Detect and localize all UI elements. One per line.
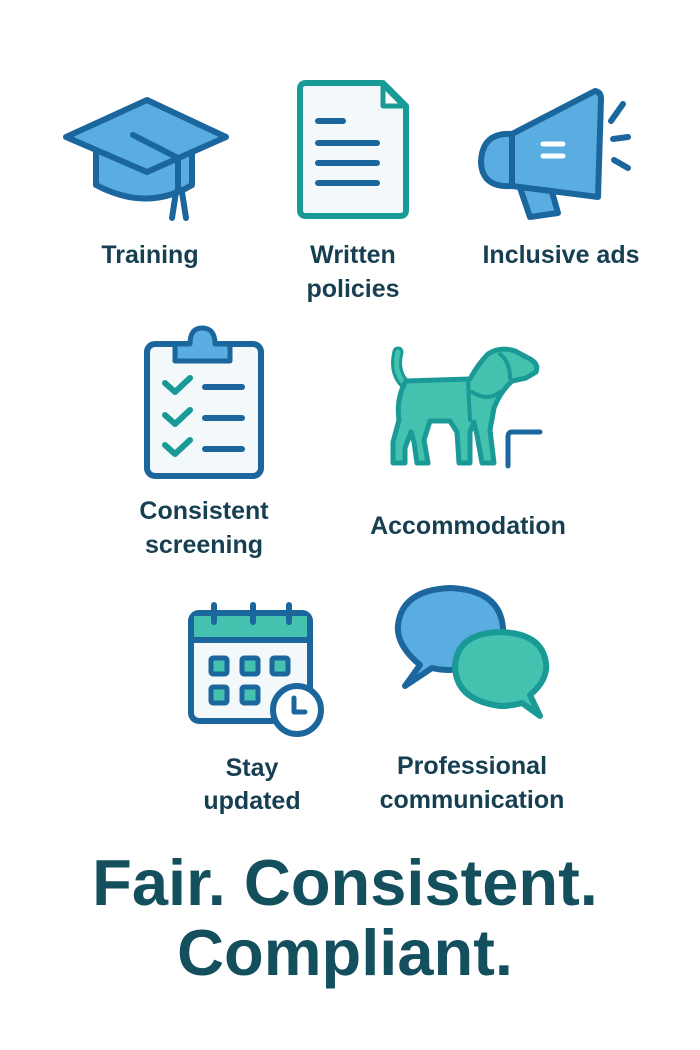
icon: calendar with clock xyxy=(191,605,321,734)
icon: clipboard xyxy=(147,328,261,476)
icon: document xyxy=(300,83,406,216)
label: Consistent screening: screening xyxy=(145,531,263,559)
label: Written policies: policies xyxy=(306,275,400,303)
label: Training: Training xyxy=(101,241,199,269)
icon: service dog xyxy=(393,349,540,466)
icon: graduation cap xyxy=(66,100,226,218)
label: Inclusive ads: Inclusive ads xyxy=(482,241,640,269)
label: Stay updated: Stay xyxy=(226,754,278,782)
headline: Compliant. xyxy=(177,916,513,989)
label: Stay updated: updated xyxy=(203,787,301,815)
label: Consistent screening: Consistent xyxy=(139,497,269,525)
icon: megaphone xyxy=(481,91,628,217)
label: Written policies: Written xyxy=(310,241,396,269)
icon: speech bubbles xyxy=(398,588,546,716)
label: Accommodation: Accommodation xyxy=(370,512,566,540)
label: Professional communication: communication xyxy=(380,786,564,814)
label: Professional communication: Professional xyxy=(397,752,547,780)
headline: Fair. Consistent. xyxy=(92,846,598,919)
